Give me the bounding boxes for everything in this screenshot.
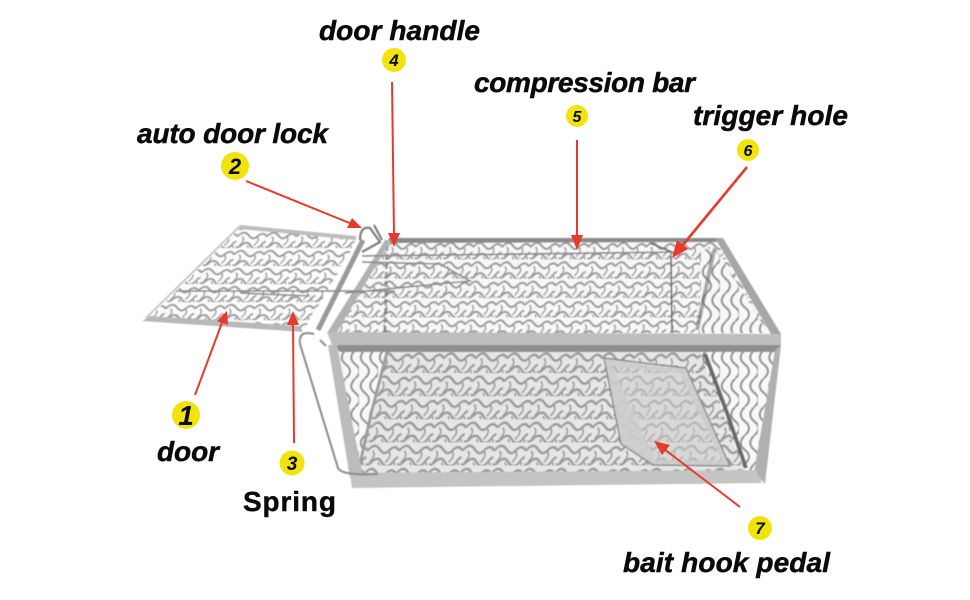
callout 6: trigger hole <box>693 100 848 161</box>
panel: cage floor mesh <box>358 350 750 476</box>
top rear bar <box>388 238 724 243</box>
callout 6: trigger hole: 6 <box>744 143 753 160</box>
callout 6: trigger hole: trigger hole <box>693 100 848 131</box>
arrow: auto door lock <box>246 181 362 228</box>
panel: top right side mesh <box>700 248 768 333</box>
spring rod to bottom <box>300 333 378 474</box>
door wires and spring rods <box>176 252 680 296</box>
callout 1: door: 1 <box>178 400 194 431</box>
callout 3: spring <box>243 450 336 517</box>
front right post <box>754 345 781 484</box>
arrow: door handle <box>388 82 400 247</box>
bait hook pedal <box>604 358 730 466</box>
callout 2: auto door lock: 2 <box>228 154 242 179</box>
callout 5: compression bar: 5 <box>573 109 583 126</box>
arrow: trigger hole <box>672 167 747 258</box>
arrow: bait hook pedal <box>654 441 740 507</box>
callout 4: door handle <box>319 15 480 72</box>
trigger rod <box>650 243 672 332</box>
callout 4: door handle: door handle <box>319 15 480 46</box>
arrow: spring <box>287 311 299 443</box>
callout 7: bait hook pedal: bait hook pedal <box>623 547 831 578</box>
callout 1: door <box>157 400 221 467</box>
illustration: metal cage trap <box>142 225 781 488</box>
panel: open door <box>142 226 363 332</box>
callout 7: bait hook pedal: 7 <box>755 519 766 538</box>
pedal plate <box>604 358 730 466</box>
door mesh <box>148 228 358 328</box>
panel: right side mesh <box>700 350 776 472</box>
arrows <box>195 82 747 507</box>
pedal mesh <box>612 366 722 460</box>
top front bar <box>327 332 781 345</box>
arrow: compression bar <box>571 140 583 250</box>
frame: cage metal bars <box>327 238 781 488</box>
top right bar <box>715 238 781 334</box>
callout 3: spring: Spring <box>243 486 336 517</box>
dark inner rear corners <box>705 354 746 468</box>
door frame <box>240 227 356 238</box>
panel: left side mesh <box>338 350 388 472</box>
callout 7: bait hook pedal <box>623 516 831 578</box>
callout 5: compression bar <box>474 67 697 127</box>
callout 3: spring: 3 <box>287 454 298 475</box>
callout 2: auto door lock: auto door lock <box>137 118 329 149</box>
callout 2: auto door lock <box>137 118 329 180</box>
top left bar <box>327 240 391 334</box>
callout 5: compression bar: compression bar <box>474 67 697 98</box>
callout 4: door handle: 4 <box>388 51 399 70</box>
arrow: door <box>195 311 228 395</box>
dark rear shadow strips on top <box>385 245 387 333</box>
auto door lock latch <box>360 225 382 252</box>
front left post <box>328 345 362 478</box>
callout 1: door: door <box>157 436 221 467</box>
panel: cage top mesh <box>336 241 770 333</box>
bottom front bar <box>350 470 762 488</box>
